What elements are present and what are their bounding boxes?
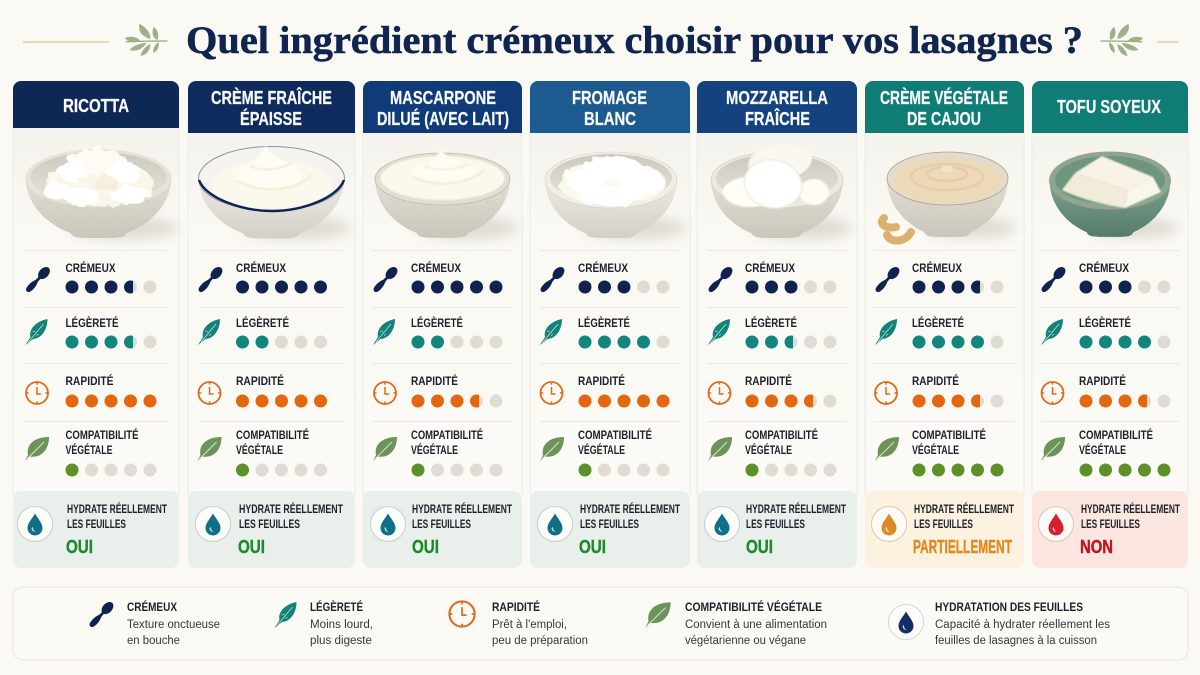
metric: crémeux	[873, 262, 1004, 295]
verdict: hydrate oui: HYDRATE RÉELLEMENT	[580, 503, 680, 516]
metric: rapidité	[875, 375, 1004, 408]
header: mascarpone dilué: DILUÉ (AVEC LAIT)	[377, 108, 509, 129]
legend: légèreté: LÉGÈRETÉ	[310, 601, 363, 614]
photo: bowl of cashew cream	[882, 152, 1016, 241]
icon: cashews	[882, 218, 911, 241]
metric: légèreté: LÉGÈRETÉ	[745, 317, 797, 330]
legend: hydratation des feuilles: Capacité à hydrater réellement les	[935, 619, 1110, 631]
legend: hydratation des feuilles: HYDRATATION DES FEUILLES	[935, 602, 1083, 614]
metric: compatibilité végétale: COMPATIBILITÉ	[411, 429, 483, 442]
metric: compatibilité végétale: COMPATIBILITÉ	[236, 429, 309, 442]
verdict: hydrate oui	[363, 491, 522, 568]
header: mozzarella fraîche	[697, 81, 857, 133]
header: mascarpone dilué: MASCARPONE	[390, 88, 496, 108]
metric: légèreté: LÉGÈRETÉ	[66, 317, 119, 330]
verdict: hydrate oui: HYDRATE RÉELLEMENT	[239, 503, 343, 516]
verdict: hydrate partiellement	[865, 491, 1024, 568]
metric: légèreté: LÉGÈRETÉ	[236, 317, 289, 330]
metric: compatibilité végétale	[1041, 429, 1170, 476]
verdict: hydrate oui	[530, 491, 690, 568]
metric: crémeux: CRÉMEUX	[411, 262, 461, 275]
legend: compatibilité végétale: Convient à une alimentation	[685, 619, 827, 631]
metric: rapidité	[1042, 375, 1170, 408]
panel: crème fraîche épaisse	[188, 81, 355, 568]
header: ricotta: RICOTTA	[63, 96, 129, 116]
legend: crémeux	[87, 600, 220, 647]
metric: compatibilité végétale	[540, 429, 670, 476]
metric: compatibilité végétale: COMPATIBILITÉ	[745, 429, 818, 442]
metric: crémeux: CRÉMEUX	[745, 262, 795, 275]
verdict: hydrate non: LES FEUILLES	[1081, 519, 1140, 531]
verdict: hydrate oui: OUI	[412, 537, 439, 557]
metric: crémeux: CRÉMEUX	[66, 262, 116, 275]
metric: légèreté	[198, 317, 327, 348]
panel: ricotta	[13, 81, 179, 568]
metric: légèreté: LÉGÈRETÉ	[912, 317, 964, 330]
metric: compatibilité végétale: VÉGÉTALE	[236, 444, 283, 457]
photo: bowl of ricotta	[26, 149, 178, 239]
verdict: hydrate oui: HYDRATE RÉELLEMENT	[412, 503, 512, 516]
metric: légèreté	[1041, 317, 1170, 348]
verdict: hydrate partiellement: HYDRATE RÉELLEMENT	[914, 503, 1014, 516]
metric: crémeux: CRÉMEUX	[1079, 262, 1129, 275]
header: crème fraîche épaisse: ÉPAISSE	[240, 108, 302, 129]
legend: légèreté: plus digeste	[310, 635, 372, 647]
title: Quel ingrédient crémeux choisir pour vos lasagnes ?	[186, 19, 1083, 62]
metric: rapidité: RAPIDITÉ	[66, 375, 114, 388]
legend: rapidité: Prêt à l'emploi,	[492, 619, 567, 631]
verdict: hydrate oui: OUI	[579, 537, 606, 557]
ornament: left line and sprig	[23, 24, 168, 56]
legend: hydratation des feuilles	[888, 602, 1110, 647]
metric: compatibilité végétale: VÉGÉTALE	[745, 444, 792, 457]
verdict: hydrate non: NON	[1080, 537, 1113, 557]
metric: légèreté: LÉGÈRETÉ	[578, 317, 630, 330]
panel: crème végétale de cajou	[865, 81, 1024, 568]
metric: rapidité	[374, 375, 502, 408]
panel: fromage blanc	[530, 81, 690, 568]
header: crème végétale de cajou	[865, 81, 1024, 133]
photo: bowl of crème fraîche	[198, 145, 351, 239]
metric: légèreté: LÉGÈRETÉ	[411, 317, 463, 330]
verdict: hydrate oui: LES FEUILLES	[239, 519, 300, 531]
metric: légèreté: LÉGÈRETÉ	[1079, 317, 1131, 330]
verdict: hydrate oui: LES FEUILLES	[67, 519, 126, 531]
metric: rapidité: RAPIDITÉ	[912, 375, 959, 388]
metric: compatibilité végétale: VÉGÉTALE	[1079, 444, 1126, 457]
header: tofu soyeux	[1032, 81, 1188, 133]
legend: compatibilité végétale	[645, 601, 827, 647]
metric: compatibilité végétale: VÉGÉTALE	[578, 444, 625, 457]
metric: légèreté	[875, 317, 1004, 348]
metric: légèreté	[373, 317, 502, 348]
photo: bowl of fromage blanc	[545, 152, 686, 239]
metric: compatibilité végétale	[198, 429, 327, 476]
verdict: hydrate oui: LES FEUILLES	[746, 519, 805, 531]
legend: compatibilité végétale: COMPATIBILITÉ VÉGÉTALE	[685, 601, 822, 614]
header: tofu soyeux: TOFU SOYEUX	[1057, 97, 1161, 117]
verdict: hydrate oui	[697, 491, 857, 568]
header: mozzarella fraîche: MOZZARELLA	[726, 88, 828, 108]
header: crème végétale de cajou: DE CAJOU	[907, 109, 981, 129]
metric: légèreté	[708, 317, 836, 348]
metric: rapidité	[540, 375, 670, 408]
ornament: right sprig and line	[1100, 24, 1178, 56]
verdict: hydrate oui: LES FEUILLES	[580, 519, 639, 531]
verdict: hydrate partiellement: PARTIELLEMENT	[913, 537, 1012, 557]
header: fromage blanc: BLANC	[584, 109, 636, 129]
header: crème fraîche épaisse: CRÈME FRAÎCHE	[211, 87, 332, 108]
metric: compatibilité végétale: VÉGÉTALE	[912, 444, 959, 457]
header: crème végétale de cajou: CRÈME VÉGÉTALE	[880, 87, 1008, 108]
legend: hydratation des feuilles: feuilles de lasagnes à la cuisson	[935, 635, 1097, 647]
metric: crémeux: CRÉMEUX	[578, 262, 628, 275]
metric: compatibilité végétale: COMPATIBILITÉ	[578, 429, 652, 442]
legend: crémeux: Texture onctueuse	[127, 619, 220, 631]
photo: bowl of mozzarella	[711, 140, 852, 239]
panel: mozzarella fraîche	[697, 81, 857, 568]
metric: crémeux: CRÉMEUX	[912, 262, 962, 275]
legend: légèreté	[274, 601, 373, 647]
header: fromage blanc: FROMAGE	[572, 88, 647, 108]
metric: crémeux	[371, 262, 502, 295]
panel: tofu soyeux	[1032, 81, 1188, 568]
metric: rapidité	[26, 375, 156, 408]
verdict: hydrate oui: HYDRATE RÉELLEMENT	[67, 503, 167, 516]
header: mozzarella fraîche: FRAÎCHE	[745, 108, 810, 129]
legend panel	[13, 587, 1188, 660]
metric: compatibilité végétale: VÉGÉTALE	[66, 444, 113, 457]
metric: rapidité: RAPIDITÉ	[1079, 375, 1126, 388]
legend: rapidité: peu de préparation	[492, 635, 588, 647]
verdict: hydrate oui	[13, 491, 179, 568]
header: fromage blanc	[530, 81, 690, 133]
legend: légèreté: Moins lourd,	[310, 619, 373, 631]
header: ricotta	[13, 81, 179, 128]
panel: mascarpone dilué	[363, 81, 522, 568]
metric: compatibilité végétale	[25, 429, 156, 476]
metric: crémeux	[706, 262, 836, 295]
metric: compatibilité végétale: VÉGÉTALE	[411, 444, 458, 457]
verdict: hydrate oui: HYDRATE RÉELLEMENT	[746, 503, 846, 516]
verdict: hydrate partiellement: LES FEUILLES	[914, 519, 973, 531]
metric: compatibilité végétale: COMPATIBILITÉ	[912, 429, 986, 442]
metric: compatibilité végétale	[373, 429, 502, 476]
legend: crémeux: CRÉMEUX	[127, 601, 177, 614]
verdict: hydrate oui: OUI	[66, 537, 93, 557]
metric: crémeux	[23, 262, 156, 295]
metric: rapidité: RAPIDITÉ	[236, 375, 284, 388]
metric: légèreté	[540, 317, 670, 348]
legend: crémeux: en bouche	[127, 635, 180, 647]
verdict: hydrate non	[1032, 491, 1188, 568]
legend: rapidité: RAPIDITÉ	[492, 601, 540, 614]
header: crème fraîche épaisse	[188, 81, 355, 133]
legend: compatibilité végétale: végétarienne ou végane	[685, 635, 806, 647]
verdict: hydrate oui	[188, 491, 355, 568]
metric: crémeux	[196, 262, 327, 295]
metric: compatibilité végétale	[708, 429, 836, 476]
metric: compatibilité végétale: COMPATIBILITÉ	[66, 429, 139, 442]
metric: rapidité: RAPIDITÉ	[411, 375, 458, 388]
photo: bowl of mascarpone	[375, 149, 518, 239]
legend: rapidité	[449, 601, 588, 647]
photo: bowl of silken tofu	[1049, 152, 1178, 238]
metric: crémeux	[538, 262, 670, 295]
metric: rapidité	[708, 375, 836, 408]
metric: compatibilité végétale	[875, 429, 1004, 476]
metric: rapidité	[198, 375, 327, 408]
metric: rapidité: RAPIDITÉ	[745, 375, 792, 388]
metric: crémeux: CRÉMEUX	[236, 262, 286, 275]
metric: rapidité: RAPIDITÉ	[578, 375, 625, 388]
metric: crémeux	[1039, 262, 1170, 295]
metric: compatibilité végétale: COMPATIBILITÉ	[1079, 429, 1153, 442]
verdict: hydrate oui: OUI	[746, 537, 773, 557]
header: mascarpone dilué	[363, 81, 522, 133]
verdict: hydrate oui: LES FEUILLES	[412, 519, 471, 531]
metric: légèreté	[26, 317, 156, 348]
verdict: hydrate oui: OUI	[238, 537, 265, 557]
